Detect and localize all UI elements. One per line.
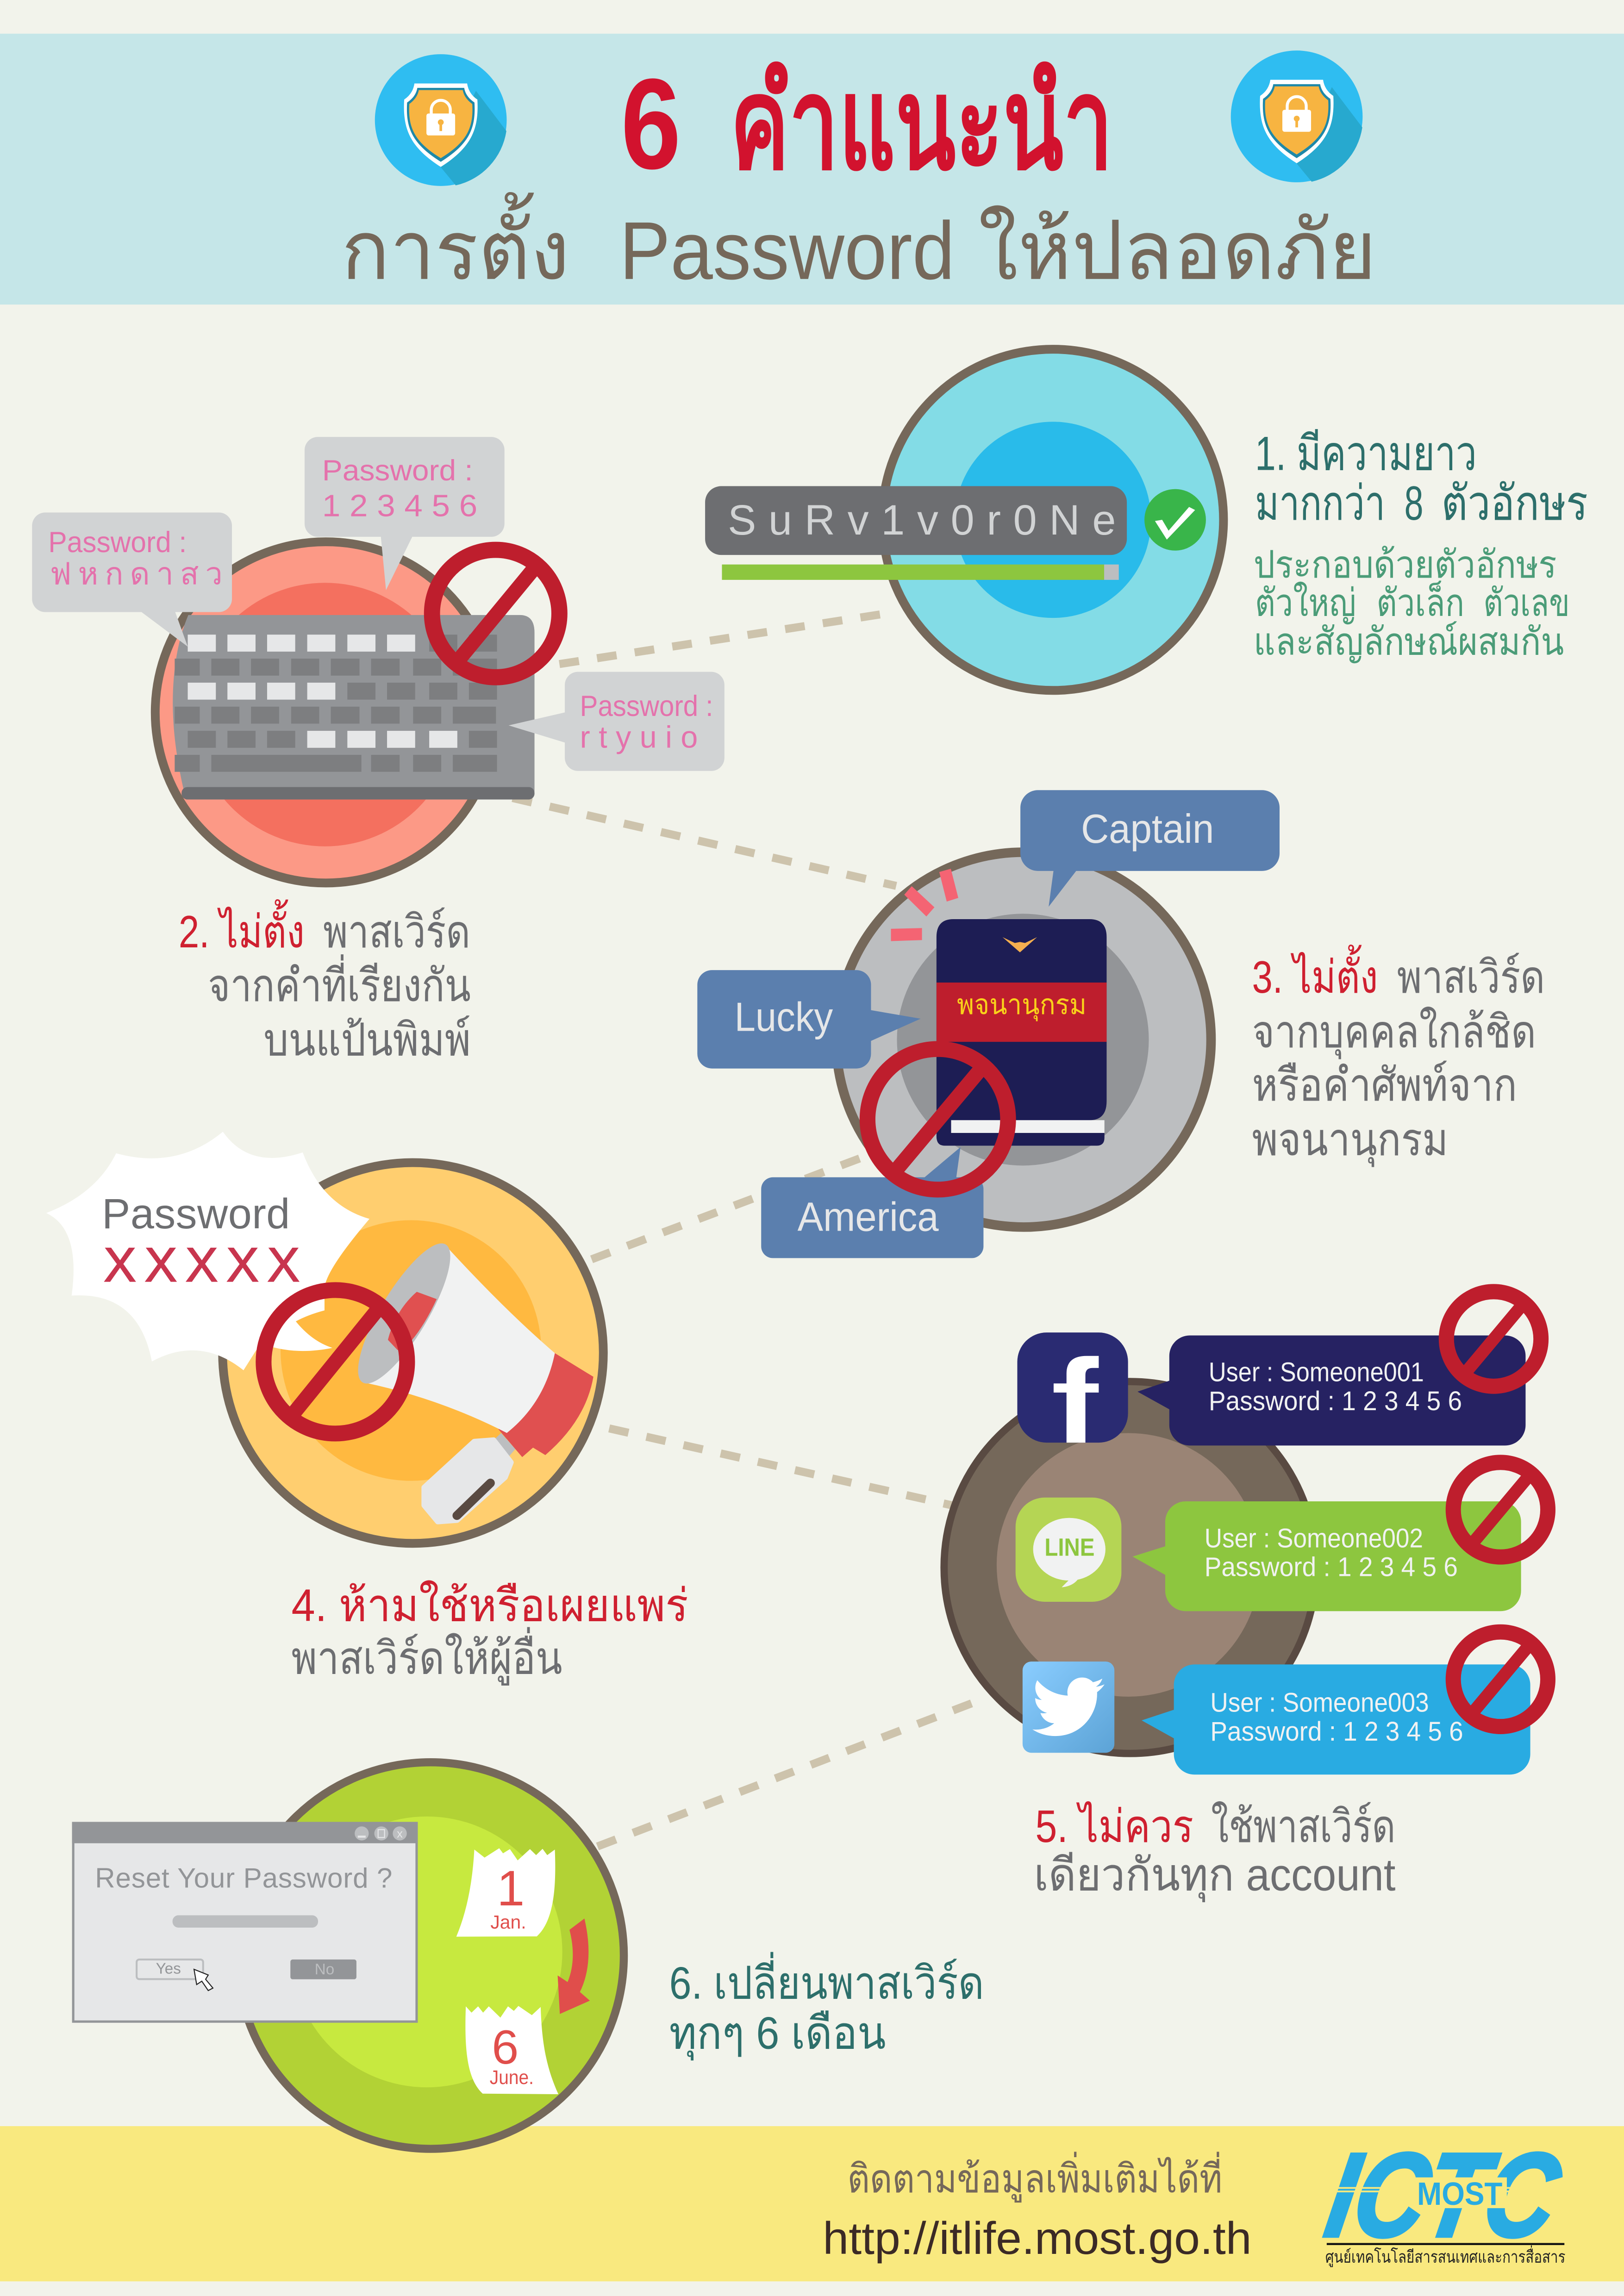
panel: step 1 <box>705 349 1588 691</box>
account bubble: LINE <box>1132 1501 1521 1611</box>
title <box>621 52 1113 196</box>
icon: prohibited <box>263 1290 407 1433</box>
icon: twitter <box>1023 1661 1114 1753</box>
calendar: Jan: Jan. <box>490 1911 526 1933</box>
text 6 <box>669 1952 984 2060</box>
icon: prohibited <box>868 1049 1008 1189</box>
subtitle: Password <box>619 205 955 297</box>
account bubble: twitter: User : Someone003 <box>1210 1687 1429 1717</box>
burst speech bubble <box>46 1132 369 1370</box>
red spark marks <box>891 869 958 941</box>
keyboard <box>173 615 535 799</box>
icon: LINE <box>1016 1498 1121 1602</box>
circle 6 <box>237 1762 624 2149</box>
panel: step 6 <box>72 1762 984 2149</box>
text 1: ประกอบด้วยตัวอักษร <box>1254 544 1556 586</box>
text 3: 3. ไม่ตั้ง <box>1252 945 1378 1002</box>
calendar: June: June. <box>490 2066 534 2089</box>
circle 2 <box>155 542 496 883</box>
circle 3 <box>836 852 1211 1227</box>
dictionary book <box>937 919 1106 1145</box>
account bubble: facebook: Password : 1 2 3 4 5 6 <box>1209 1386 1462 1416</box>
footer content <box>823 2128 1571 2267</box>
speech bubble: Lucky: Lucky <box>735 994 833 1039</box>
text 2: บนแป้นพิมพ์ <box>263 1014 471 1065</box>
panel: step 3 <box>697 790 1545 1258</box>
icon: facebook <box>1017 1332 1128 1443</box>
speech bubble: Captain <box>1020 790 1280 907</box>
follow-more text: ติดตามข้อมูลเพิ่มเติมได้ที่ <box>848 2152 1222 2203</box>
speech bubble: thai keys: ฟหกดาสว <box>50 557 223 591</box>
account bubble: twitter <box>1142 1664 1530 1774</box>
speech bubble: thai keys <box>32 512 232 647</box>
icon: mouse cursor <box>194 1969 213 1991</box>
icon: megaphone <box>343 1232 593 1521</box>
panel: step 4 <box>46 1132 688 1686</box>
text 1: ตัวใหญ่ <box>1255 581 1356 624</box>
text 1 <box>1254 544 1570 663</box>
text 2: 2. ไม่ตั้ง <box>179 899 305 957</box>
title: 6 <box>621 52 681 196</box>
icon: prohibited <box>1453 1462 1548 1557</box>
dialog window: x <box>397 1828 403 1841</box>
account bubble: facebook: User : Someone001 <box>1209 1357 1424 1388</box>
text 3: หรือคำศัพท์จาก <box>1252 1059 1517 1110</box>
password field <box>705 486 1127 555</box>
text 6: 6. เปลี่ยนพาสเวิร์ด <box>669 1952 984 2009</box>
password field: SuRv1v0r0Ne <box>728 497 1116 544</box>
circle 4 <box>223 1163 603 1543</box>
subtitle: การตั้ง <box>341 192 569 297</box>
text 2: พาสเวิร์ด <box>323 906 470 957</box>
heading 1: ตัวอักษร <box>1442 476 1588 530</box>
speech bubble: Lucky <box>697 970 921 1069</box>
account bubble: LINE: Password : 1 2 3 4 5 6 <box>1205 1552 1458 1582</box>
calendar: Jan: 1 <box>497 1860 525 1916</box>
text 3: พาสเวิร์ด <box>1397 952 1545 1002</box>
subtitle: ให้ปลอดภัย <box>978 205 1376 297</box>
burst speech bubble: XXXXX <box>104 1238 300 1292</box>
text 4: พาสเวิร์ดให้ผู้อื่น <box>291 1627 562 1686</box>
calendar: Jan <box>456 1848 555 1937</box>
icon: prohibited <box>432 550 559 677</box>
title: คำแนะนำ <box>730 52 1113 196</box>
text 1: ตัวเล็ก <box>1376 580 1464 624</box>
text 2 <box>179 899 471 1065</box>
circle 1 <box>882 349 1224 691</box>
icon: prohibited <box>1453 1632 1548 1727</box>
speech bubble: letters <box>509 672 725 771</box>
heading 1: 1. มีความยาว <box>1255 427 1477 481</box>
calendar: June: 6 <box>492 2020 518 2074</box>
dialog window <box>72 1822 418 2022</box>
text 3 <box>1252 945 1545 1167</box>
speech bubble: America <box>761 1147 983 1258</box>
text 3: จากบุคคลใกล้ชิด <box>1252 1006 1536 1059</box>
text 5 <box>1034 1801 1396 1903</box>
text 5: เดียวกันทุก account <box>1034 1849 1396 1903</box>
icon: LINE: LINE <box>1044 1533 1094 1561</box>
icon: check <box>1144 489 1206 551</box>
panel: step 5 <box>944 1292 1548 1903</box>
strength bar <box>722 565 1119 580</box>
connector lines <box>512 614 984 1847</box>
header band <box>0 34 1624 305</box>
text 1: และสัญลักษณ์ผสมกัน <box>1254 621 1564 663</box>
text 3: พจนานุกรม <box>1252 1114 1448 1167</box>
heading 1: 8 <box>1405 476 1424 530</box>
account bubble: facebook <box>1137 1335 1525 1445</box>
text 5: 5. ไม่ควร <box>1035 1801 1193 1852</box>
speech bubble: letters: r t y u i o <box>580 720 698 754</box>
calendar: June <box>465 2006 558 2094</box>
footer band <box>0 2126 1624 2281</box>
text 5: ใช้พาสเวิร์ด <box>1211 1801 1396 1852</box>
icon: prohibited <box>1446 1292 1541 1386</box>
circle 5 <box>944 1381 1316 1754</box>
subtitle <box>341 192 1376 297</box>
speech bubble: America: America <box>798 1194 939 1240</box>
text 1: ตัวเลข <box>1483 582 1570 624</box>
speech bubble: numbers: Password : <box>322 454 473 487</box>
dictionary book: พจนานุกรม <box>957 989 1087 1021</box>
speech bubble: Captain: Captain <box>1081 806 1214 852</box>
account bubble: LINE: User : Someone002 <box>1205 1524 1423 1554</box>
icon: shield right <box>1231 50 1362 182</box>
dialog window: No <box>315 1961 334 1978</box>
heading 1 <box>1255 427 1588 530</box>
dialog window: Reset Your Password ? <box>95 1863 392 1894</box>
dialog window: Yes <box>156 1960 181 1978</box>
text 6: ทุกๆ 6 เดือน <box>669 2007 886 2060</box>
text 4: 4. ห้ามใช้หรือเผยแพร่ <box>291 1580 688 1630</box>
text 4 <box>291 1580 688 1686</box>
text 2: จากคำที่เรียงกัน <box>208 954 471 1011</box>
icon: shield left <box>375 54 506 186</box>
burst speech bubble: Password <box>102 1190 290 1238</box>
logo: ICTC MOST: ICTC <box>1318 2128 1569 2261</box>
panel: step 2 <box>32 437 725 1065</box>
heading 1: มากกว่า <box>1255 476 1385 530</box>
account bubble: twitter: Password : 1 2 3 4 5 6 <box>1210 1717 1463 1747</box>
website url: http://itlife.most.go.th <box>823 2213 1252 2264</box>
speech bubble: letters: Password : <box>580 690 713 722</box>
logo: ICTC MOST: ศูนย์เทคโนโลยีสารสนเทศและการสื่อสาร <box>1325 2246 1565 2267</box>
logo: ICTC MOST: MOST <box>1417 2176 1502 2212</box>
speech bubble: numbers <box>305 437 505 590</box>
arrow <box>558 1918 590 2014</box>
speech bubble: thai keys: Password : <box>48 526 187 559</box>
speech bubble: numbers: 1 2 3 4 5 6 <box>322 489 477 523</box>
